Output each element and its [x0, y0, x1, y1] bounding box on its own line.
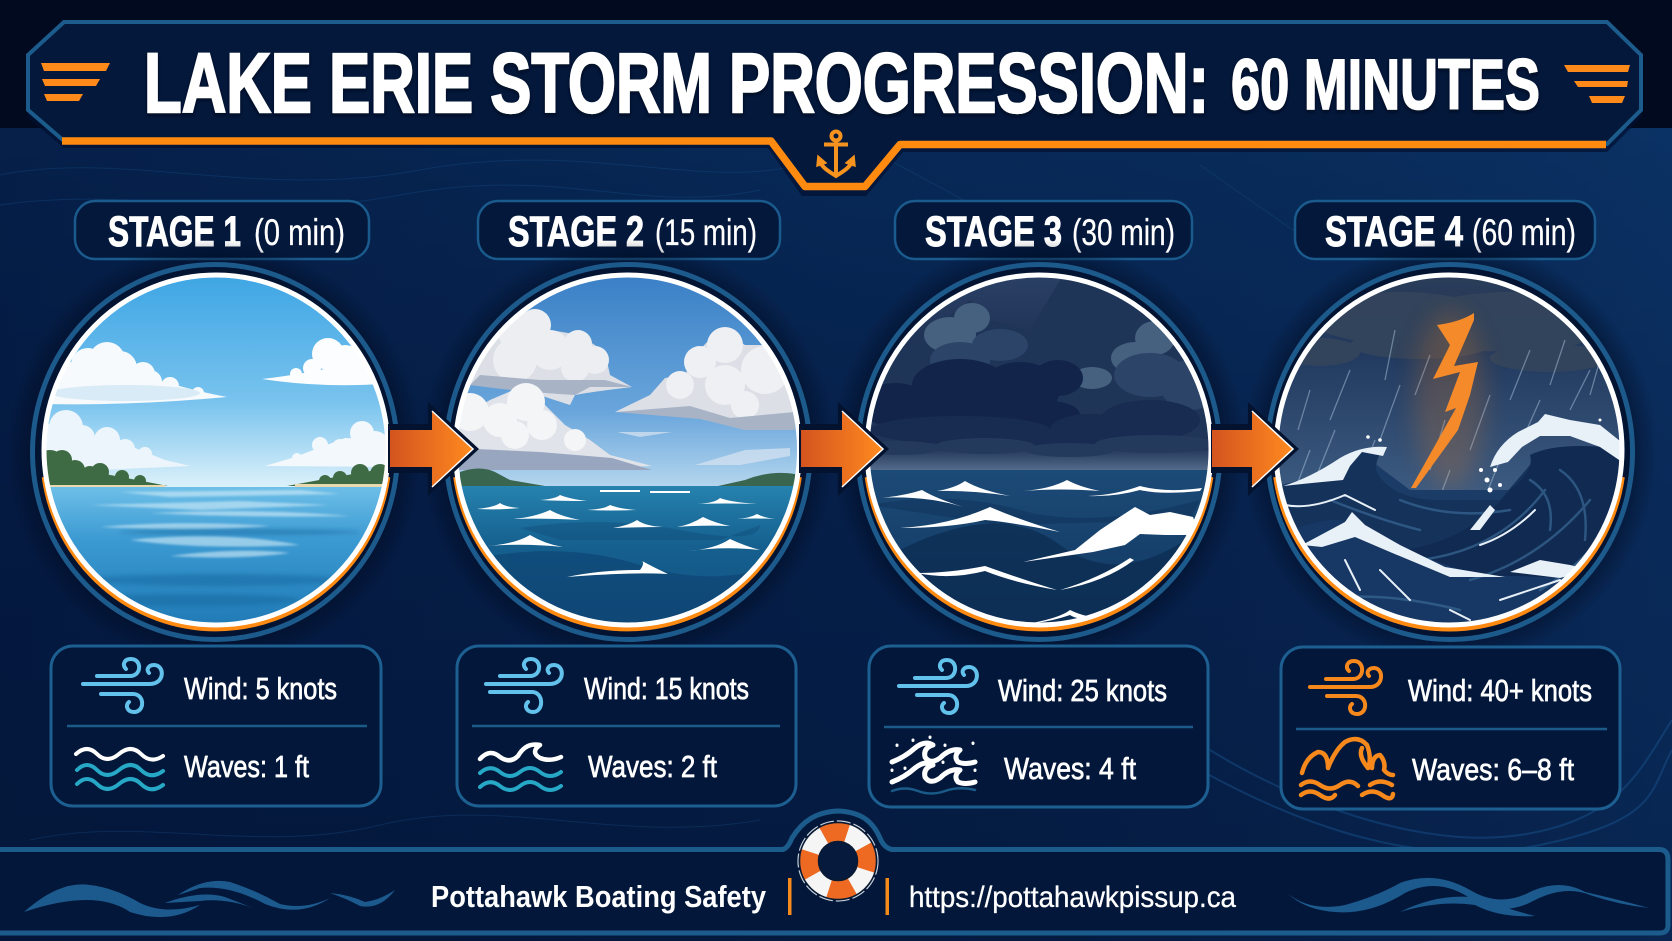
- info panel: stage 4: [1281, 647, 1620, 809]
- stage labels: [75, 201, 1595, 259]
- title: LAKE ERIE STORM PROGRESSION:: [144, 36, 1209, 130]
- text: waves: Waves: 4 ft: [1004, 751, 1136, 786]
- stage 1 label: (0 min): [254, 212, 345, 253]
- footer brand: Pottahawk Boating Safety: [431, 879, 767, 914]
- halo behind circles: [7, 239, 1658, 665]
- icon: right orange stripes: [1564, 65, 1630, 103]
- text: waves: Waves: 2 ft: [588, 749, 717, 784]
- waves: [1282, 446, 1620, 622]
- stage 3 label: [895, 201, 1192, 259]
- stage 2 label: [478, 201, 780, 259]
- text: wind: Wind: 25 knots: [998, 673, 1167, 708]
- water: [50, 487, 382, 622]
- right cloud: [615, 327, 795, 430]
- tree lines: [35, 450, 390, 488]
- ring: [1276, 275, 1622, 629]
- sky: [1270, 275, 1630, 490]
- icon: waves: [1301, 739, 1393, 798]
- icon: wind: [1310, 661, 1381, 714]
- water: [462, 486, 794, 622]
- icon: left orange stripes: [41, 63, 110, 101]
- text: waves: Waves: 1 ft: [184, 749, 309, 784]
- stage 2 label: STAGE 2: [508, 208, 644, 256]
- storm clouds: [1301, 292, 1598, 372]
- footer: [0, 811, 1668, 933]
- icon: wind: [899, 660, 977, 713]
- sky: [860, 275, 1220, 471]
- foam: [1283, 414, 1625, 578]
- clouds: [451, 308, 795, 470]
- footer panel: [0, 811, 1668, 933]
- storm clouds: [860, 280, 1220, 457]
- banner panel: [28, 22, 1641, 196]
- stage 4 label: STAGE 4: [1325, 208, 1463, 256]
- stage 1 label: [75, 201, 369, 259]
- icon: life ring: [798, 821, 878, 901]
- arrow: stage 2 to 3: [799, 402, 889, 496]
- lower left cloud: [451, 383, 652, 470]
- whitecaps: [875, 480, 1202, 624]
- sky: [450, 275, 805, 487]
- info panel: stage 1: [51, 646, 381, 806]
- scene 4: lightning and large waves: [1268, 264, 1640, 640]
- icon: waves: [76, 749, 163, 789]
- stage 2 label: (15 min): [655, 212, 757, 253]
- footer right wave: [1287, 878, 1649, 916]
- clouds: [32, 338, 390, 470]
- text: wind: Wind: 15 knots: [584, 671, 749, 706]
- water: [870, 470, 1208, 622]
- text: wind: Wind: 5 knots: [184, 671, 337, 706]
- whitecaps: [477, 490, 775, 577]
- stage 3 label: (30 min): [1072, 212, 1175, 253]
- stage 1 label: STAGE 1: [108, 208, 241, 256]
- info panel: stage 2: [457, 646, 796, 806]
- sky: [40, 275, 392, 487]
- info panel: stage 3: [869, 646, 1208, 807]
- stage 4 label: [1295, 201, 1595, 259]
- icon: anchor: [817, 132, 855, 176]
- scene 3: dark storm clouds and whitecaps: [858, 264, 1220, 640]
- stage 3 label: STAGE 3: [925, 208, 1062, 256]
- ring: [456, 275, 800, 629]
- upper left cloud: [470, 308, 632, 405]
- icon: wind: [486, 659, 562, 712]
- lightning bolt: [1411, 310, 1486, 490]
- ring: [44, 275, 388, 629]
- footer left wave: [24, 881, 395, 917]
- title: 60 MINUTES: [1231, 46, 1540, 125]
- text: waves: Waves: 6–8 ft: [1412, 752, 1574, 787]
- stage 4 label: (60 min): [1472, 212, 1576, 253]
- scene 1: calm water: [32, 264, 398, 640]
- arrow: stage 1 to 2: [388, 402, 479, 496]
- icon: waves: [892, 737, 975, 794]
- text: wind: Wind: 40+ knots: [1408, 673, 1592, 708]
- arrow: stage 3 to 4: [1211, 402, 1299, 496]
- icon: wind: [83, 659, 162, 712]
- scene 2: building clouds and chop: [446, 264, 810, 640]
- tree lines: [460, 468, 795, 486]
- icon: waves: [480, 744, 561, 790]
- ring: [867, 275, 1211, 629]
- title banner: [28, 22, 1641, 196]
- rain: [1298, 330, 1598, 490]
- footer separators: [788, 878, 889, 915]
- footer url: https://pottahawkpissup.ca: [909, 881, 1236, 914]
